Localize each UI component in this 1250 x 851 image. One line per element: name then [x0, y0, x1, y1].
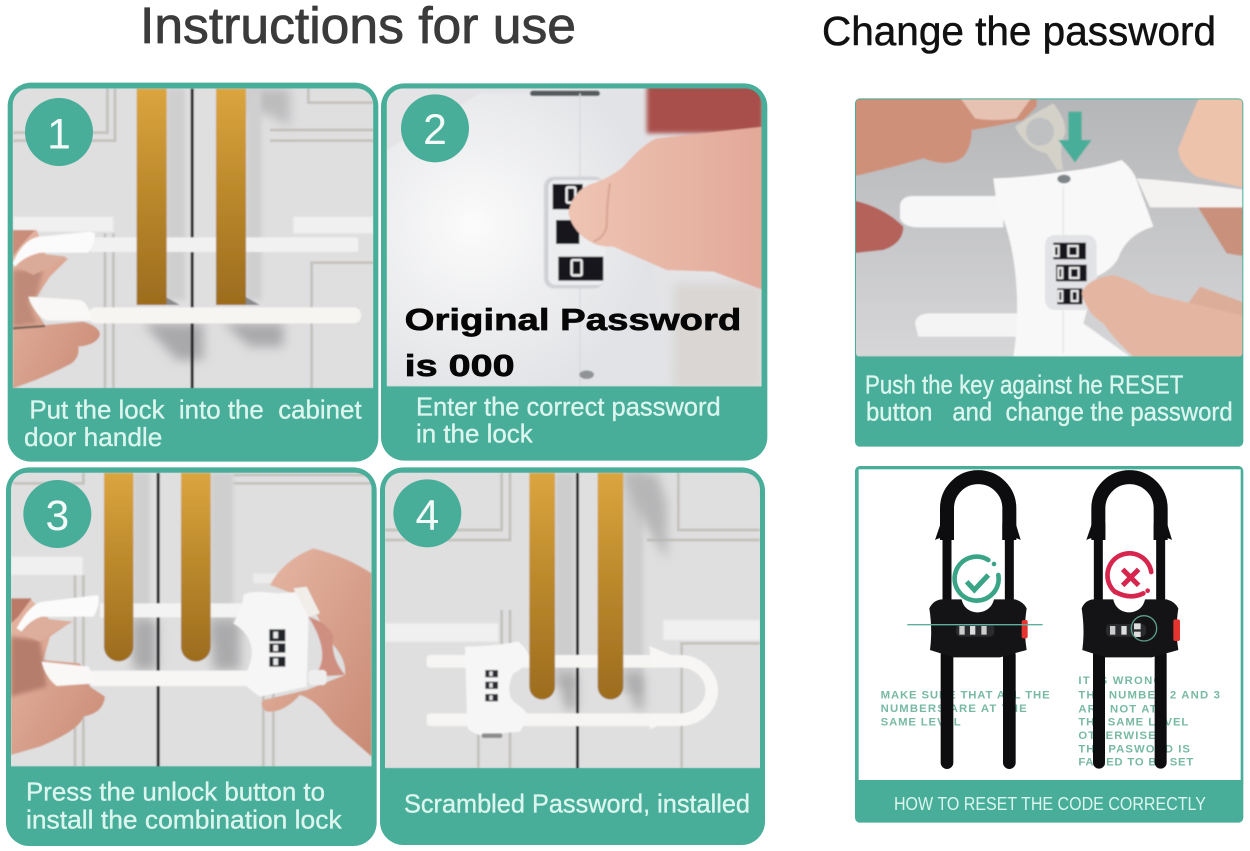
- caption 3: Press the unlock button to: [26, 777, 325, 807]
- caption 2: in the lock: [416, 419, 534, 449]
- number badge 2: [401, 94, 469, 162]
- wrong lock: [1082, 477, 1180, 763]
- icon: green check: [955, 557, 999, 601]
- hand holding lock: [13, 230, 100, 388]
- white U lock shackle: [427, 646, 712, 729]
- reset photo: [852, 95, 1247, 357]
- thumb on wheels: [1082, 275, 1247, 357]
- panel: step 2: [381, 83, 767, 461]
- number badge 1: [25, 98, 93, 166]
- number badge 3: 3: [45, 492, 69, 540]
- caption 2: Enter the correct password: [416, 392, 721, 422]
- panel: step 4: [380, 467, 765, 845]
- caption 2: [416, 392, 721, 449]
- caption 5: [865, 369, 1233, 427]
- title: change the password: Change the password: [822, 8, 1216, 54]
- original password note: is 000: [405, 349, 515, 383]
- number badge 4: 4: [415, 491, 439, 539]
- step 3 photo: [7, 468, 377, 767]
- caption 3: install the combination lock: [26, 804, 343, 834]
- caption 3: [26, 777, 343, 834]
- left hand: [11, 595, 105, 755]
- wrong note text: ARE NOT AT: [1078, 703, 1157, 715]
- white lock body: [465, 642, 528, 738]
- caption 5: Push the key against he RESET: [865, 369, 1183, 399]
- reset key: [1015, 103, 1065, 170]
- correct note text: SAME LEVEL: [881, 717, 961, 729]
- wrong note text: THE NUMBER 2 AND 3: [1078, 689, 1220, 701]
- white lock body: [233, 587, 327, 697]
- caption 4: Scrambled Password, installed: [404, 789, 750, 819]
- step 2 photo: [383, 83, 763, 390]
- panel: step 3: [6, 467, 377, 846]
- caption 1: door handle: [24, 422, 162, 452]
- correct note text: NUMBERS ARE AT THE: [881, 703, 1027, 715]
- correct note text: [881, 689, 1050, 729]
- panel: step 1: [7, 83, 380, 462]
- caption 6: HOW TO RESET THE CODE CORRECTLY: [894, 793, 1206, 814]
- caption 1: [24, 394, 362, 452]
- original password note: Original Password: [405, 303, 741, 337]
- thumb: [568, 127, 763, 290]
- correct note text: MAKE SURE THAT ALL THE: [881, 689, 1050, 701]
- wrong note text: OTHERWISE,: [1078, 730, 1160, 742]
- right hand: [261, 548, 372, 757]
- wrong note text: FAILED TO BE SET: [1078, 757, 1193, 769]
- original password note: [405, 303, 741, 383]
- number badge 4: [393, 479, 461, 547]
- panel: how to reset correctly: [855, 466, 1243, 823]
- number badge 2: 2: [423, 106, 447, 154]
- arrow: push down: [1058, 112, 1092, 163]
- step 1 photo: [7, 83, 380, 388]
- icon: red cross: [1105, 550, 1153, 596]
- lock shackle arms: [900, 178, 1247, 337]
- panel: change password step: [852, 95, 1247, 447]
- combination wheels: [544, 177, 605, 288]
- caption 1: Put the lock into the cabinet: [29, 394, 362, 424]
- number badge 1: 1: [47, 110, 71, 158]
- combination wheels: [1045, 235, 1097, 310]
- correct lock: [907, 477, 1043, 763]
- white lock body: [993, 160, 1153, 357]
- step 4 photo: [380, 468, 763, 768]
- wrong note text: [1078, 675, 1220, 769]
- wrong note text: THE PASWORD IS: [1078, 743, 1190, 755]
- number badge 3: [23, 480, 91, 548]
- right hands: [1178, 99, 1242, 316]
- left hands: [852, 95, 1037, 253]
- wrong note text: IT IS WRONG,: [1078, 675, 1167, 687]
- wrong note text: THE SAME LEVEL: [1078, 717, 1188, 729]
